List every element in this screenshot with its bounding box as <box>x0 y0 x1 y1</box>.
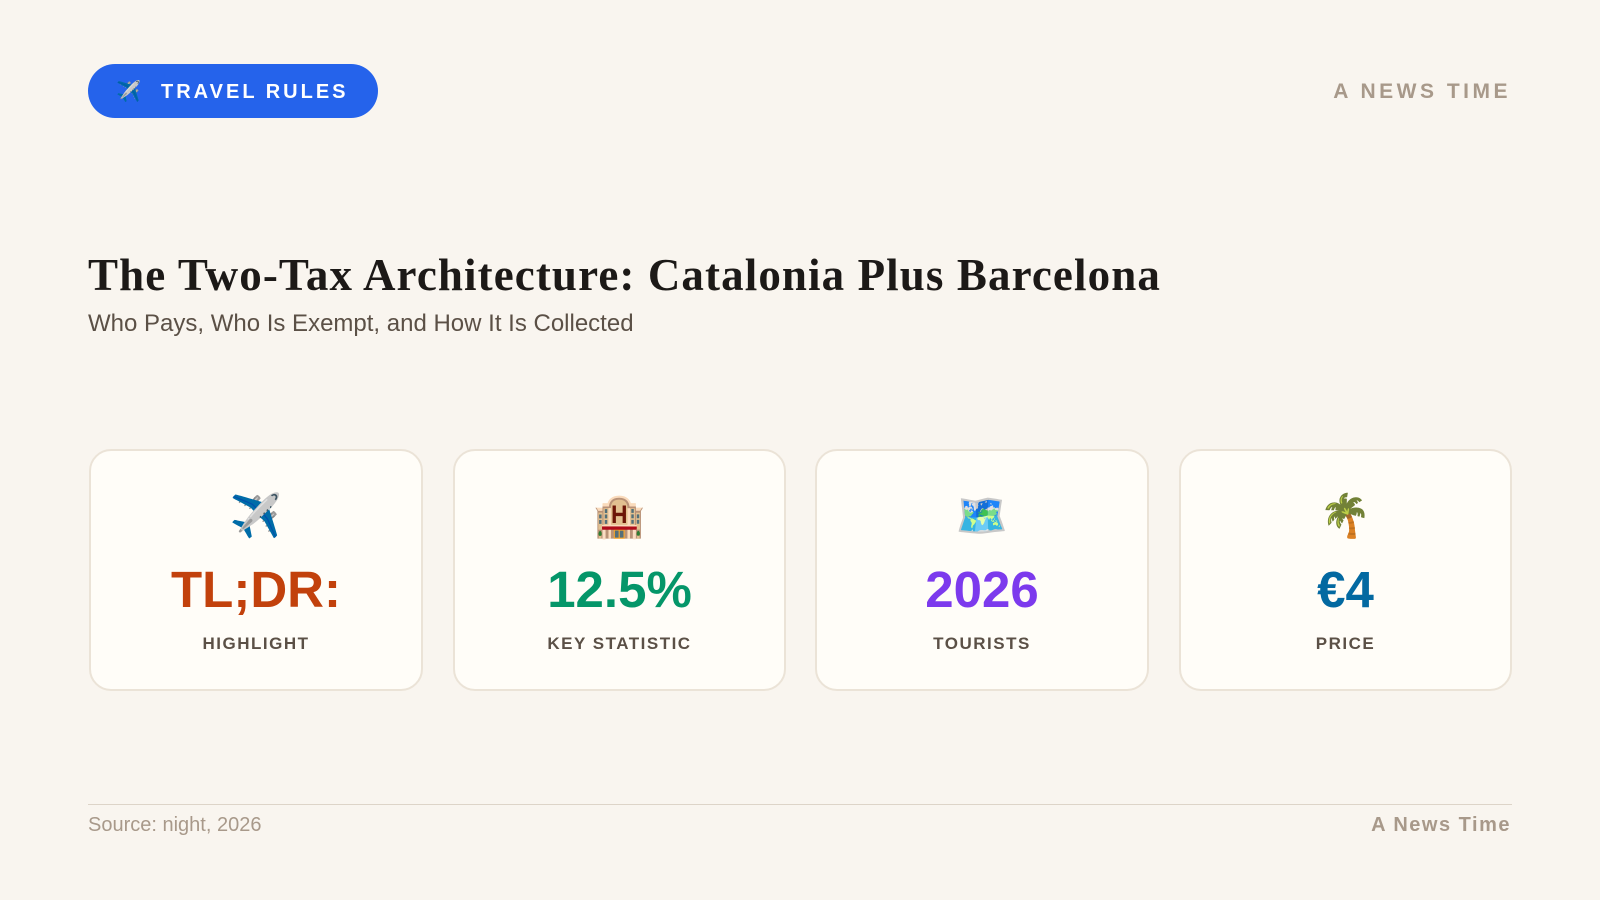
tag pill: ✈️ TRAVEL RULES <box>116 80 349 102</box>
title: The Two-Tax Architecture: Catalonia Plus Barcelona <box>88 250 1161 300</box>
value: €4 <box>1317 561 1374 618</box>
brand: A NEWS TIME <box>1333 80 1511 103</box>
icon: map: 🗺️ <box>956 492 1008 539</box>
icon: palm: 🌴 <box>1319 492 1372 539</box>
card: key statistic <box>453 449 786 691</box>
card: highlight <box>89 449 423 691</box>
value: 2026 <box>925 561 1039 618</box>
tag pill <box>88 64 378 118</box>
card: tourists <box>815 449 1149 691</box>
value: TL;DR: <box>171 561 341 618</box>
icon: plane: ✈️ <box>230 492 282 539</box>
footer brand: A News Time <box>1371 814 1511 836</box>
card: price <box>1179 449 1512 691</box>
subtitle: Who Pays, Who Is Exempt, and How It Is Collected <box>88 310 634 337</box>
source: Source: night, 2026 <box>88 814 261 836</box>
icon: hotel: 🏨 <box>593 492 646 539</box>
value: 12.5% <box>547 561 692 618</box>
label: TOURISTS <box>933 634 1031 653</box>
label: PRICE <box>1316 634 1375 653</box>
label: KEY STATISTIC <box>547 634 692 653</box>
label: HIGHLIGHT <box>202 634 310 653</box>
